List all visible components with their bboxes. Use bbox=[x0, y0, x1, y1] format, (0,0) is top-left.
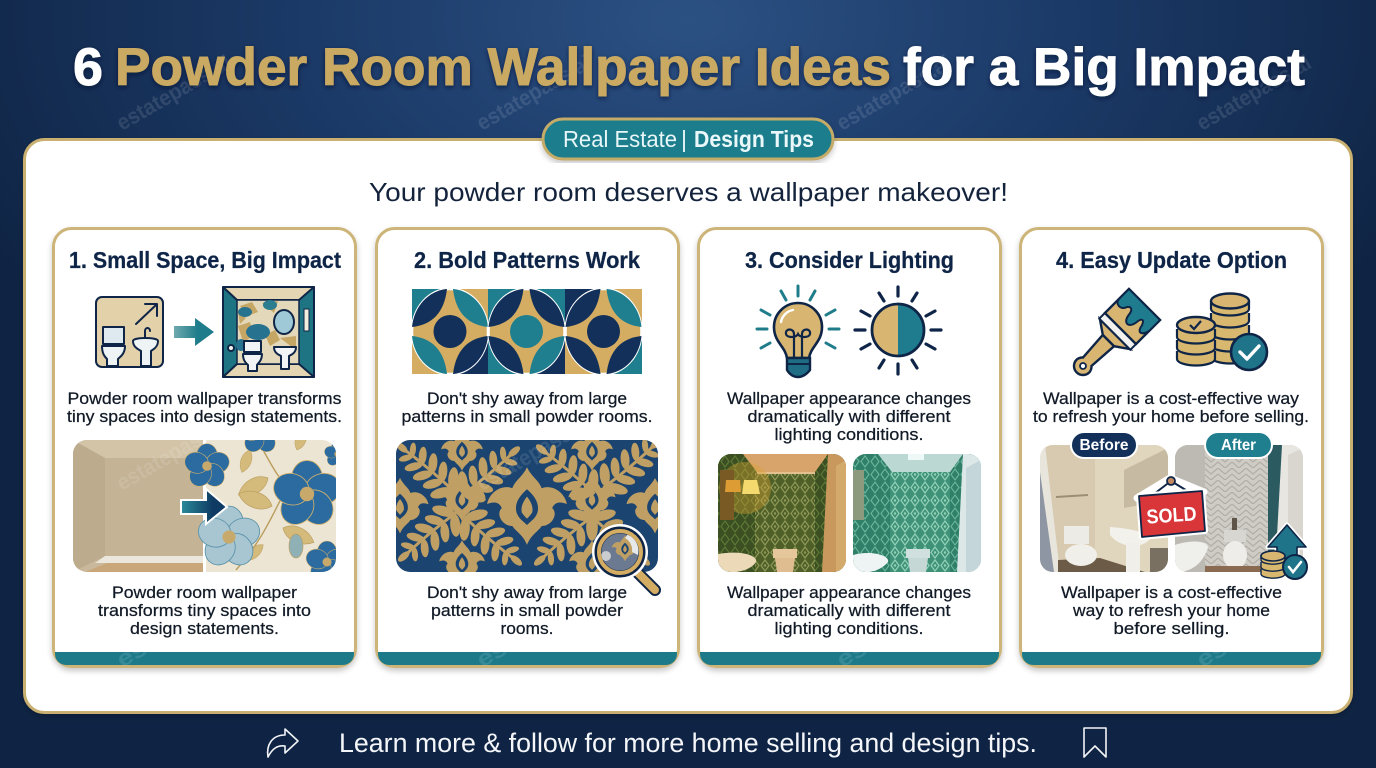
icon: magnifier bbox=[592, 524, 655, 590]
watermarks on header: estatepass.ai bbox=[472, 50, 595, 135]
label: before bbox=[1071, 432, 1137, 458]
card 1 footer band bbox=[55, 652, 354, 665]
tile 1 bbox=[412, 289, 488, 374]
label: after: After bbox=[1221, 437, 1256, 454]
icon: light bulb bbox=[757, 286, 839, 377]
category pill: Real Estate bbox=[563, 126, 677, 152]
panel: card 4 bbox=[1020, 228, 1322, 666]
card 3 lower text: Wallpaper appearance changes bbox=[727, 583, 971, 602]
icon: coins with check bbox=[1177, 294, 1267, 370]
title: for a Big Impact bbox=[903, 38, 1305, 97]
card 2 heading: 2. Bold Patterns Work bbox=[414, 247, 640, 273]
photo: warm lighting bbox=[718, 454, 846, 573]
watermarks on header: estatepass.ai bbox=[1192, 50, 1315, 135]
category pill: | bbox=[681, 126, 687, 152]
icon: small room bbox=[96, 297, 163, 367]
geometric pattern swatch bbox=[412, 289, 642, 374]
icon: wallpapered room bbox=[223, 287, 314, 377]
tile 3 bbox=[566, 289, 642, 374]
arrow bbox=[174, 318, 214, 346]
card 3 footer band bbox=[700, 652, 999, 665]
card 2 lower text bbox=[427, 583, 627, 638]
icon: sold sign: SOLD bbox=[1146, 503, 1197, 529]
photo: cool lighting bbox=[853, 454, 981, 573]
category pill bbox=[543, 119, 833, 159]
card 4 lower text: before selling. bbox=[1114, 619, 1230, 638]
title: Powder Room Wallpaper Ideas bbox=[115, 38, 891, 97]
photo: before bbox=[1040, 445, 1168, 572]
card 4 lower text: way to refresh your home bbox=[1072, 601, 1270, 620]
photo: damask wallpaper bbox=[396, 440, 661, 596]
footer text: Learn more & follow for more home selling and design tips. bbox=[339, 728, 1037, 758]
card 2 lower text: rooms. bbox=[500, 619, 554, 638]
watermarks on panel: est bbox=[472, 630, 520, 672]
card 4 upper text: Wallpaper is a cost-effective way bbox=[1043, 389, 1300, 408]
watermarks on panel: estatepass.ai bbox=[472, 410, 595, 495]
card 2 footer band bbox=[378, 652, 677, 665]
tile 2 bbox=[488, 289, 564, 374]
card 1 upper text bbox=[67, 389, 342, 426]
card 4 heading: 4. Easy Update Option bbox=[1056, 247, 1287, 273]
card 2 upper text: patterns in small powder rooms. bbox=[402, 407, 652, 426]
card 3 upper text: lighting conditions. bbox=[774, 425, 924, 444]
card 2 lower text: patterns in small powder bbox=[431, 601, 623, 620]
label: before: Before bbox=[1080, 437, 1129, 454]
subtitle: Your powder room deserves a wallpaper makeover! bbox=[369, 177, 1008, 207]
main white panel bbox=[24, 140, 1352, 712]
watermarks on panel: estatepass.ai bbox=[112, 410, 235, 495]
card 2 upper text bbox=[402, 389, 652, 426]
card 3 lower text: lighting conditions. bbox=[774, 619, 924, 638]
card 1 upper text: Powder room wallpaper transforms bbox=[68, 389, 342, 408]
watermarks on panel: est bbox=[1192, 630, 1240, 672]
card 2 lower text: Don't shy away from large bbox=[427, 583, 627, 602]
icon: half sun bbox=[855, 287, 941, 374]
card 2 upper text: Don't shy away from large bbox=[427, 389, 627, 408]
card 3 lower text bbox=[727, 583, 971, 638]
watermarks on panel bbox=[112, 410, 1240, 672]
panel: card 3 bbox=[698, 228, 1000, 666]
icon: share arrow bbox=[268, 729, 298, 757]
card 1 lower text: transforms tiny spaces into bbox=[98, 601, 311, 620]
watermarks on header: estatepass.ai bbox=[832, 50, 955, 135]
icon: sold sign bbox=[1137, 477, 1205, 537]
card 1 lower text bbox=[98, 583, 311, 638]
watermarks on panel: est bbox=[112, 630, 160, 672]
watermarks on panel: est bbox=[832, 630, 880, 672]
watermarks on header bbox=[112, 50, 1315, 135]
card 4 lower text bbox=[1061, 583, 1282, 638]
card 3 upper text: Wallpaper appearance changes bbox=[727, 389, 971, 408]
card 1 heading: 1. Small Space, Big Impact bbox=[69, 247, 341, 273]
card 4 upper text bbox=[1033, 389, 1309, 426]
label: after bbox=[1205, 432, 1272, 458]
card 4 footer band bbox=[1022, 652, 1321, 665]
card 1 lower text: design statements. bbox=[130, 619, 279, 638]
card 4 lower text: Wallpaper is a cost-effective bbox=[1061, 583, 1282, 602]
category pill: Design Tips bbox=[694, 126, 814, 152]
panel: card 1 bbox=[54, 228, 356, 666]
card 3 heading: 3. Consider Lighting bbox=[745, 247, 954, 273]
card 4 upper text: to refresh your home before selling. bbox=[1033, 407, 1309, 426]
card 1 lower text: Powder room wallpaper bbox=[112, 583, 297, 602]
title: 6 bbox=[73, 38, 103, 97]
title bbox=[73, 38, 1305, 97]
card 3 upper text: dramatically with different bbox=[748, 407, 951, 426]
photo: after bbox=[1175, 445, 1303, 572]
card 3 upper text bbox=[727, 389, 971, 444]
icon: paint brush bbox=[1061, 289, 1160, 388]
watermarks on header: estatepass.ai bbox=[112, 50, 235, 135]
card 1 upper text: tiny spaces into design statements. bbox=[67, 407, 342, 426]
panel: card 2 bbox=[372, 228, 684, 666]
photo: plain room and floral wallpaper bbox=[73, 440, 336, 572]
icon: bookmark bbox=[1084, 728, 1106, 757]
icon: value up bbox=[1261, 525, 1307, 579]
card 3 lower text: dramatically with different bbox=[748, 601, 951, 620]
